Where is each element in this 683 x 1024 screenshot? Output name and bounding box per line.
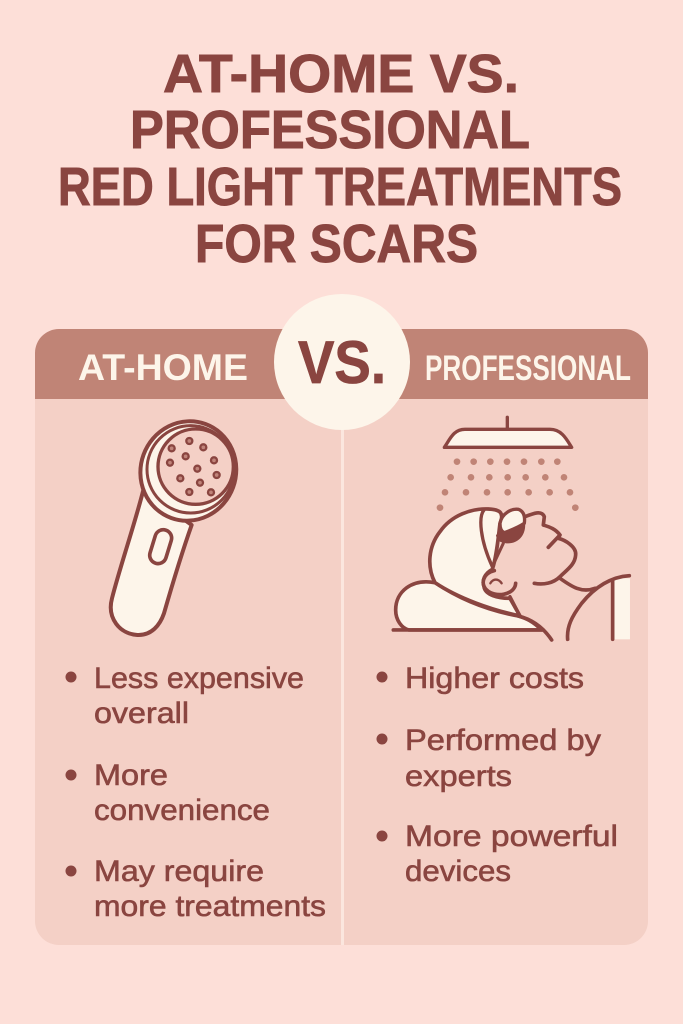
lamp [444, 417, 572, 447]
list: at-home points [66, 662, 326, 923]
bullet: more convenience: More [94, 759, 168, 792]
bullet: performed by experts: experts [405, 760, 512, 793]
bullet: more powerful devices: devices [405, 855, 511, 888]
title: FOR SCARS [195, 214, 478, 274]
light dots [437, 458, 579, 511]
bullet: more powerful devices: More powerful [405, 820, 618, 853]
device led dots [167, 438, 220, 495]
bullet: more convenience: convenience [94, 794, 270, 827]
title: PROFESSIONAL [130, 100, 530, 160]
towel wrap [430, 509, 520, 616]
bullet: higher costs: Higher costs [405, 662, 584, 695]
column divider [341, 425, 344, 945]
header band [35, 329, 648, 399]
pillow [396, 582, 542, 630]
device button [148, 528, 174, 566]
bullet: may require more treatments: more treatments [94, 890, 326, 923]
bullet: may require more treatments [66, 855, 326, 923]
list: professional points [376, 662, 618, 888]
ear [483, 571, 516, 595]
neck and shoulder [560, 578, 595, 590]
title: AT-HOME VS. [163, 44, 519, 104]
bullet: less expensive [66, 662, 304, 730]
bullet: may require more treatments: May require [94, 855, 264, 888]
eye mask [492, 509, 525, 567]
title [58, 44, 622, 274]
bullet: less expensive: Less expensive [94, 662, 304, 695]
vs badge [274, 294, 410, 430]
bullet: performed by experts [376, 724, 601, 793]
bullet: more convenience [66, 759, 270, 827]
icon: handheld red light device [111, 408, 250, 635]
heading: at-home: AT-HOME [78, 347, 248, 388]
panel: comparison card [35, 329, 648, 945]
bullet: performed by experts: Performed by [405, 724, 601, 757]
bullet: more powerful devices [376, 820, 618, 888]
icon: person under professional red light panel [393, 417, 630, 640]
face profile [525, 513, 576, 584]
bullet: less expensive: overall [94, 697, 189, 730]
vs badge: VS. [298, 329, 386, 396]
